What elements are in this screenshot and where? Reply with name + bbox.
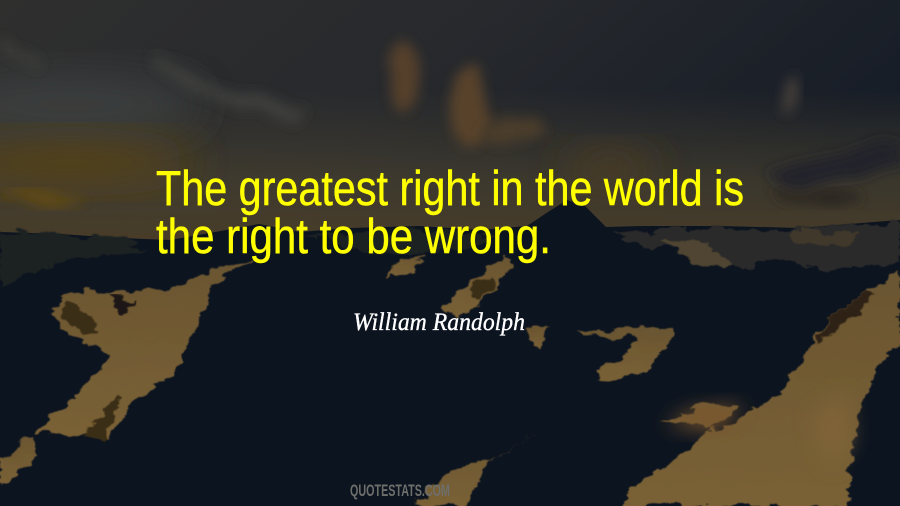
- dark mountain base: [0, 200, 900, 506]
- quote text: [156, 162, 744, 264]
- author name: William Randolph: [353, 309, 525, 336]
- clouds: orange glow and pale streaks: [0, 36, 900, 205]
- quote line 2: the right to be wrong.: [156, 210, 551, 264]
- lit slopes: [0, 255, 900, 506]
- sky background: [0, 0, 900, 260]
- distant ridges: [0, 222, 900, 285]
- warm highlights and rock streaks: [62, 275, 878, 470]
- mountain range: [0, 200, 900, 506]
- watermark: QUOTESTATS.COM: [350, 481, 450, 500]
- quote line 1: The greatest right in the world is: [156, 162, 744, 216]
